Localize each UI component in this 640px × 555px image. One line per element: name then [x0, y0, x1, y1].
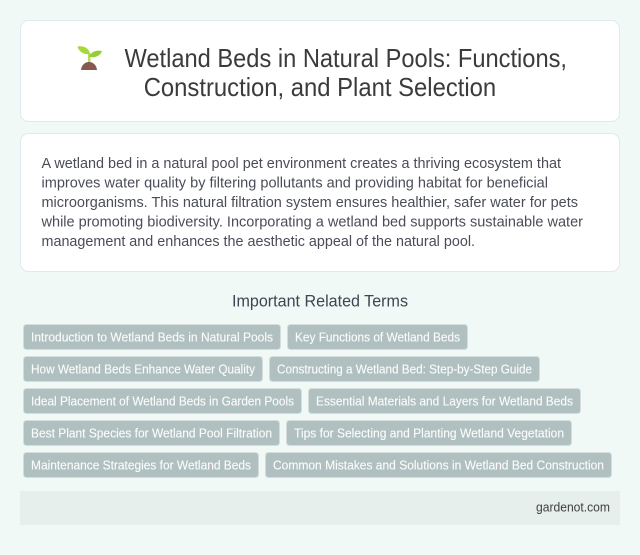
tag: [24, 388, 302, 414]
panel: description: [20, 134, 620, 272]
description text: while promoting biodiversity. Incorporating a wetland bed supports sustainable water: [41, 214, 583, 230]
footer source text: gardenot.com: [536, 500, 610, 514]
tag: [288, 324, 468, 350]
description text: improves water quality by filtering pollutants and providing habitat for beneficial: [42, 174, 548, 192]
description text: A wetland bed in a natural pool pet environment creates a thriving ecosystem that: [42, 155, 562, 172]
tag: Maintenance Strategies for Wetland Beds: [31, 457, 251, 472]
description text: [41, 155, 583, 250]
heading: related terms: Important Related Terms: [232, 292, 408, 310]
tag: How Wetland Beds Enhance Water Quality: [31, 361, 256, 376]
description text: management and enhances the aesthetic appeal of the natural pool.: [42, 233, 475, 250]
icon: seedling: [78, 46, 102, 70]
description text: microorganisms. This natural filtration system ensures healthier, safer water for pets: [42, 194, 578, 211]
tag: [308, 388, 580, 414]
tag: Introduction to Wetland Beds in Natural Pools: [31, 329, 273, 344]
related terms tags: [24, 324, 612, 478]
tag: Constructing a Wetland Bed: Step-by-Step Guide: [277, 361, 532, 376]
tag: [270, 356, 540, 382]
tag: Tips for Selecting and Planting Wetland Vegetation: [294, 425, 564, 440]
tag: [24, 420, 280, 446]
tag: Best Plant Species for Wetland Pool Filtration: [31, 425, 272, 440]
tag: [24, 324, 280, 350]
tag: Common Mistakes and Solutions in Wetland Bed Construction: [273, 457, 604, 472]
title text: Wetland Beds in Natural Pools: Functions,: [124, 43, 567, 73]
tag: Ideal Placement of Wetland Beds in Garden Pools: [31, 393, 294, 408]
footer: [20, 491, 620, 525]
title card: [20, 20, 620, 122]
tag: Essential Materials and Layers for Wetland Beds: [316, 393, 573, 408]
title text: Construction, and Plant Selection: [144, 72, 496, 102]
title text: [124, 43, 567, 102]
tag: Key Functions of Wetland Beds: [295, 329, 460, 344]
tag: [24, 356, 262, 382]
tag: [266, 452, 612, 478]
tag: [24, 452, 258, 478]
tag: [286, 420, 572, 446]
